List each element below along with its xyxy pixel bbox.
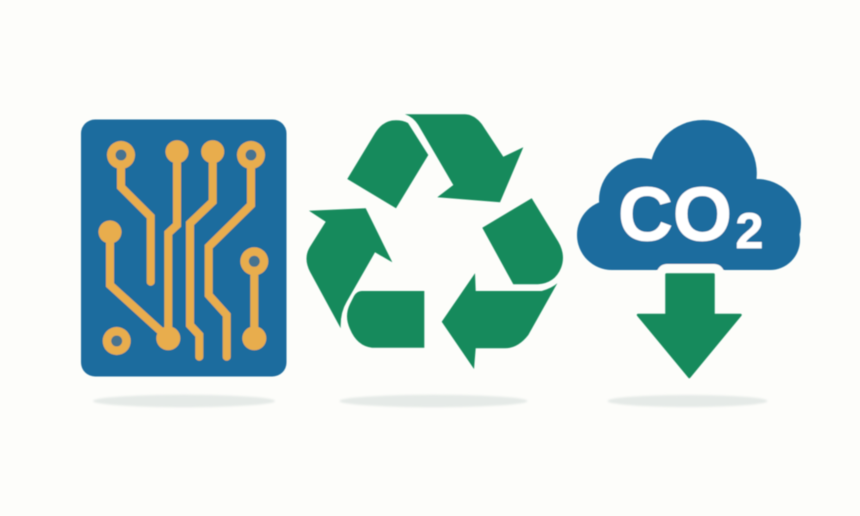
CO2 label: 2: [736, 203, 763, 259]
recycle segment: right: [482, 198, 563, 284]
recycle arrow: top right: [405, 114, 523, 202]
shadow: CO2 cloud: [608, 395, 768, 407]
recycle segment: top left: [347, 120, 428, 208]
shadow: recycle symbol: [340, 395, 528, 407]
icon: circuit board: [81, 120, 286, 376]
cloud notch: [657, 264, 724, 271]
down arrow: [638, 274, 740, 377]
CO2 label: CO: [618, 172, 732, 258]
recycle arrow: left: [306, 208, 392, 328]
shadow: circuit board: [93, 395, 275, 407]
icon: recycle symbol: [306, 114, 563, 369]
icon: CO2 cloud with down arrow: [577, 120, 801, 377]
recycle arrow: bottom right: [442, 273, 557, 369]
solder pads: [98, 140, 268, 355]
pad holes: [111, 150, 260, 346]
board background: [81, 120, 286, 376]
circuit traces: [110, 152, 254, 357]
recycle segment: bottom left: [347, 291, 424, 348]
cloud shape: [577, 120, 801, 270]
